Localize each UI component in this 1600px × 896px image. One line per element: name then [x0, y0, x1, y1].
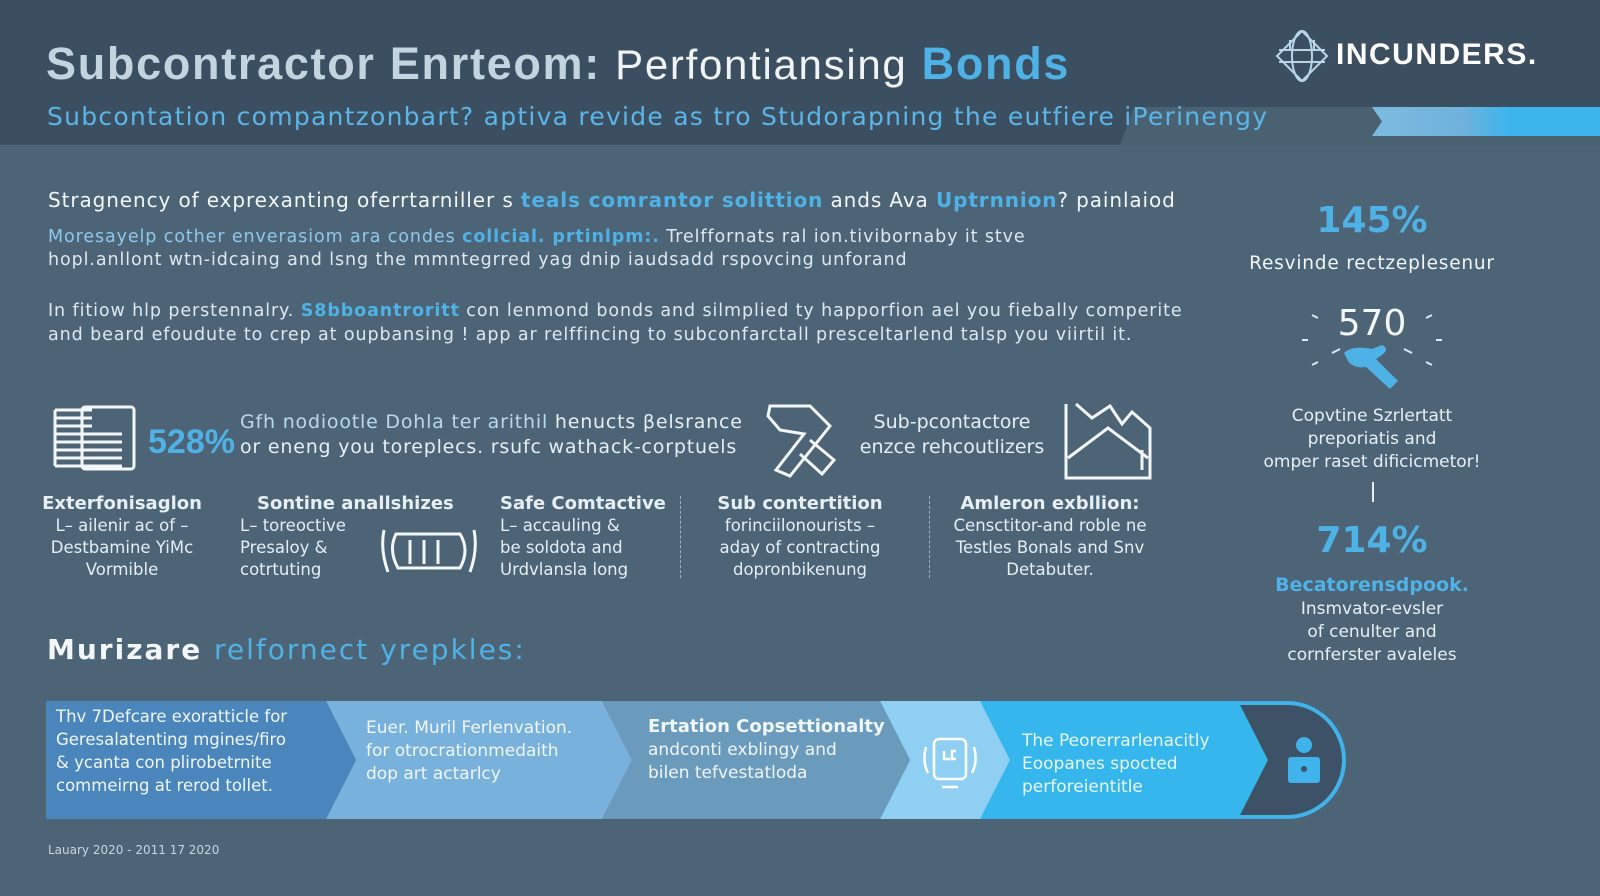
logo: INCUNDERS.	[1336, 38, 1538, 71]
icon: globe	[1276, 30, 1328, 82]
paragraph 1: hopl.anllont wtn-idcaing and lsng the mmntegrred yag dnip iaudsadd rspovcing unforand	[48, 250, 907, 270]
subtitle: Subcontation compantzonbart? aptiva revide as tro Studorapning the eutfiere iPerinengy	[47, 102, 1268, 131]
column: Sontine analshizes: L– toreoctive	[240, 516, 346, 535]
step 3: Ertation Copsettionalty	[648, 716, 885, 737]
footer date: Lauary 2020 - 2011 17 2020	[48, 843, 219, 857]
blue label: Becatorensdpook.	[1275, 574, 1469, 596]
process chevron band	[46, 701, 1346, 819]
right column stats	[1249, 200, 1495, 665]
step 3: andconti exblingy and	[648, 740, 837, 760]
text: Insmvator-evsler	[1301, 599, 1443, 619]
text: benefits: Gfh nodiootle Dohla ter arithil henucts βelsrance	[240, 411, 743, 433]
column: Exterfonisaglon: Destbamine YiMc	[51, 538, 193, 557]
label: Resvinde rectzeplesenur	[1249, 253, 1495, 274]
step 3: bilen tefvestatloda	[648, 763, 807, 783]
text	[1264, 406, 1480, 472]
icon: 570 pointer: 570	[1338, 303, 1406, 344]
title: Subcontractor Enrteom: Perfontiansing Bonds	[46, 38, 1070, 89]
icon: handshake	[381, 530, 477, 572]
column: Safe Comtactive: Safe Comtactive	[500, 493, 666, 514]
step 2	[326, 701, 632, 819]
icon: person lock	[1288, 737, 1320, 783]
paragraph 2: In fitiow hlp perstennalry. S8bboantroritt con lenmond bonds and silmplied ty happorfion ael you fiebally comperite	[48, 301, 1183, 321]
text: sub-contactore: enzce rehcoutlizers	[860, 436, 1044, 458]
icon: wrench tools	[766, 404, 836, 478]
stat: 145%: 145%	[1316, 200, 1428, 241]
step 1: Geresalatenting mgines/firo	[56, 730, 286, 749]
column: Sub contertition: dopronbikenung	[733, 560, 867, 579]
column: Sontine analshizes: Presaloy &	[240, 538, 328, 557]
column: Exterfonisaglon: Vormible	[86, 560, 158, 579]
column: Amleron exbllion: Amleron exbllion:	[960, 493, 1139, 514]
step 2: dop art actarlcy	[366, 764, 501, 784]
column: Exterfonisaglon: L– ailenir ac of –	[55, 516, 188, 535]
paragraph 2: and beard efoudute to crep at oupbansing ! app ar relffincing to subconfarctall presceltarlend talsp you viirtil it.	[48, 325, 1132, 345]
column: Sontine analshizes	[240, 493, 454, 579]
text: sub-contactore: Sub-pcontactore	[874, 411, 1030, 433]
step 1	[46, 701, 356, 819]
section heading: Murizare relfornect yrepkles:	[47, 633, 526, 666]
column: Amleron exbllion: Censctitor-and roble ne	[954, 516, 1146, 535]
paragraph 1	[48, 227, 1026, 270]
step 5	[976, 701, 1268, 819]
light blue stripe	[1372, 107, 1600, 136]
column: Safe Comtactive: L– accauling &	[500, 516, 620, 535]
step 1: commeirng at rerod tollet.	[56, 776, 273, 795]
column: Safe Comtactive: be soldota and	[500, 538, 623, 557]
column: Safe Comtactive: Urdvlansla long	[500, 560, 628, 579]
column: Exterfonisaglon	[42, 493, 202, 579]
step 3	[602, 701, 910, 819]
text: sub-contactore	[860, 411, 1044, 458]
text	[1287, 599, 1457, 665]
column: Sub contertition: aday of contracting	[720, 538, 880, 557]
intro heading: Stragnency of expreхanting oferrtarniller s teals comrantor solittion ands Ava Uptrnnion? painlaiod	[48, 188, 1176, 212]
step 2: for otrocrationmedaith	[366, 741, 559, 761]
step 5: Eoopanes spocted	[1022, 754, 1178, 774]
icon: 570 pointer	[1302, 303, 1442, 389]
column: Sub contertition	[717, 493, 883, 579]
step 5: perforeientitle	[1022, 777, 1143, 797]
column: Sontine analshizes: cotrtuting	[240, 560, 321, 579]
logo	[1276, 30, 1538, 82]
step 5: The Peorerrarlenacitly	[1022, 731, 1210, 751]
column: Sontine analshizes: Sontine anallshizes	[257, 493, 454, 514]
column: Sub contertition: forinciilonourists –	[725, 516, 875, 535]
column: Amleron exbllion	[954, 493, 1146, 579]
stat: 528%: 528%	[148, 423, 235, 461]
column: Exterfonisaglon: Exterfonisaglon	[42, 493, 202, 514]
column: Safe Comtactive	[500, 493, 666, 579]
column: Amleron exbllion: Testles Bonals and Snv	[956, 538, 1144, 557]
paragraph 1: Moresayelp cother enverasiom ara condes collcial. prtinlpm:. Trelffornats ral ion.tivibornaby it stve	[48, 227, 1026, 247]
paragraph 2	[48, 301, 1183, 345]
text: preporiatis and	[1308, 429, 1436, 449]
text: benefits: or eneng you toreplecs. rsufc wathack-corptuels	[240, 436, 737, 458]
text: Copvtine Szrlertatt	[1292, 406, 1452, 426]
step 1: & ycanta con plirobetrnite	[56, 753, 272, 772]
header background	[0, 0, 1600, 145]
text: benefits	[240, 411, 743, 458]
text: cornferster avaleles	[1287, 645, 1457, 665]
stat: 714%: 714%	[1316, 520, 1428, 561]
column: Sub contertition: Sub contertition	[717, 493, 883, 514]
step 4 icon	[880, 701, 1010, 819]
column: Amleron exbllion: Detabuter.	[1006, 560, 1094, 579]
step 2: Euer. Muril Ferlenvation.	[366, 718, 572, 738]
step 1: Thv 7Defcare exoratticle for	[56, 707, 287, 726]
icon: documents	[54, 406, 136, 470]
icon: building	[1064, 403, 1152, 480]
text: of cenulter and	[1307, 622, 1437, 642]
text: omper raset dificicmetor!	[1264, 452, 1480, 472]
